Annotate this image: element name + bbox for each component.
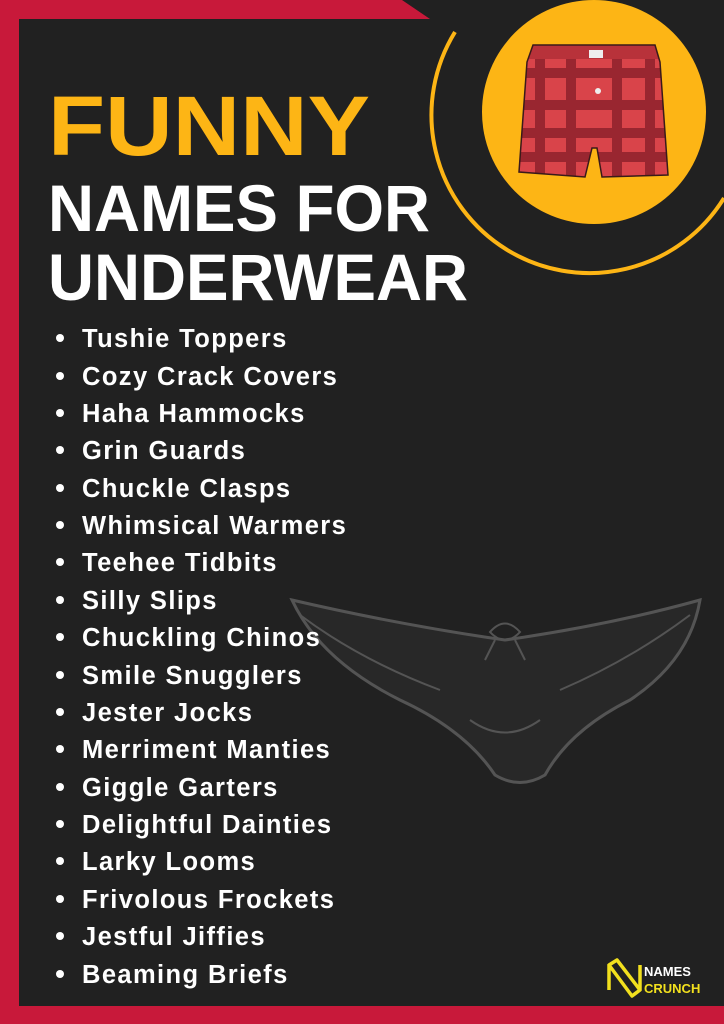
list of names: Haha Hammocks <box>82 400 306 428</box>
title: UNDERWEAR <box>48 240 468 314</box>
list of names: Jester Jocks <box>82 699 253 727</box>
title: FUNNY <box>48 79 370 173</box>
list of names <box>56 325 347 989</box>
list of names: Merriment Manties <box>82 736 331 764</box>
list of names: Beaming Briefs <box>82 961 289 989</box>
list of names: Chuckling Chinos <box>82 624 321 652</box>
list of names: Frivolous Frockets <box>82 886 335 914</box>
list of names: Giggle Garters <box>82 774 279 802</box>
logo: names crunch <box>609 960 700 996</box>
list of names: Larky Looms <box>82 848 256 876</box>
list of names: Whimsical Warmers <box>82 512 347 540</box>
logo: names crunch: NAMES <box>644 964 691 979</box>
yellow circle with boxer shorts <box>482 0 706 224</box>
decorative lace underwear drawing <box>292 600 700 782</box>
ring arc <box>431 32 724 273</box>
list of names: Cozy Crack Covers <box>82 363 338 391</box>
list of names: Smile Snugglers <box>82 662 303 690</box>
list of names: Jestful Jiffies <box>82 923 266 951</box>
title <box>48 79 468 314</box>
title: NAMES FOR <box>48 171 430 245</box>
icon: plaid boxer shorts <box>518 44 669 178</box>
list of names: Tushie Toppers <box>82 325 288 353</box>
list of names: Silly Slips <box>82 587 218 615</box>
list of names: Chuckle Clasps <box>82 475 292 503</box>
list of names: Teehee Tidbits <box>82 549 278 577</box>
logo: names crunch: CRUNCH <box>644 981 700 996</box>
list of names: Delightful Dainties <box>82 811 332 839</box>
list of names: Grin Guards <box>82 437 246 465</box>
